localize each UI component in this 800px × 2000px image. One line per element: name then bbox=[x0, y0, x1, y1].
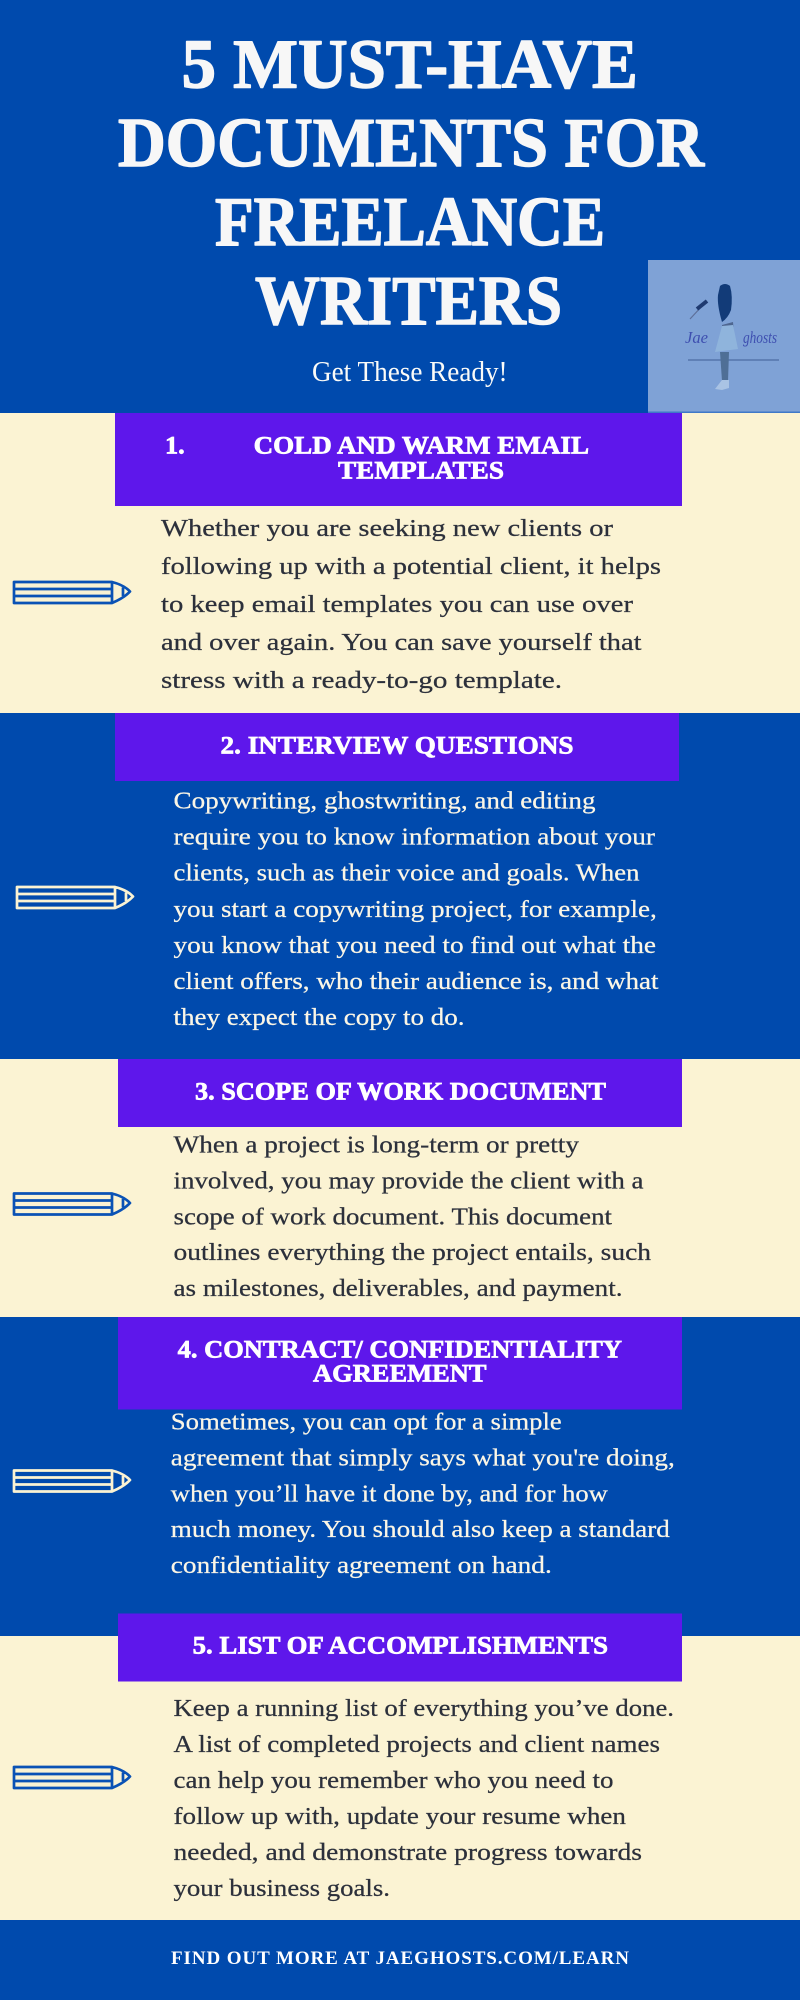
heading bar 1: 1. bbox=[165, 432, 185, 459]
icon: pencil 5 bbox=[14, 1767, 130, 1788]
heading bar 1: COLD AND WARM EMAIL bbox=[254, 432, 589, 459]
heading bar 5 bbox=[118, 1614, 682, 1682]
body text 3: involved, you may provide the client with a bbox=[174, 1167, 644, 1194]
heading bar 2: 2. INTERVIEW QUESTIONS bbox=[220, 732, 574, 759]
body text 1: and over again. You can save yourself that bbox=[161, 629, 642, 656]
body text 5: Keep a running list of everything you’ve done. bbox=[174, 1695, 674, 1722]
subtitle: Get These Ready! bbox=[312, 357, 508, 388]
body text 4: agreement that simply says what you're doing, bbox=[171, 1444, 675, 1471]
title: WRITERS bbox=[255, 263, 562, 340]
body text 3 bbox=[174, 1131, 651, 1302]
body text 2 bbox=[174, 788, 659, 1031]
panel: section 1 email templates bbox=[0, 413, 800, 713]
body text 2: require you to know information about your bbox=[174, 824, 655, 851]
body text 3: outlines everything the project entails, such bbox=[174, 1239, 651, 1266]
heading bar 2 bbox=[115, 713, 679, 781]
title: 5 MUST-HAVE bbox=[182, 26, 638, 103]
heading bar 3: 3. SCOPE OF WORK DOCUMENT bbox=[195, 1079, 606, 1106]
icon: pencil 4 bbox=[14, 1470, 130, 1492]
logo: Jae ghosts figure: ghosts bbox=[743, 328, 777, 347]
body text 5: needed, and demonstrate progress towards bbox=[174, 1839, 642, 1866]
body text 1: Whether you are seeking new clients or bbox=[161, 515, 613, 542]
heading bar 4 bbox=[118, 1317, 682, 1410]
body text 4 bbox=[171, 1408, 675, 1579]
body text 2: you know that you need to find out what the bbox=[174, 932, 656, 959]
body text 4: when you’ll have it done by, and for how bbox=[171, 1480, 608, 1507]
body text 3: scope of work document. This document bbox=[174, 1203, 612, 1230]
heading bar 1 bbox=[115, 413, 682, 506]
body text 5: A list of completed projects and client names bbox=[174, 1731, 660, 1758]
body text 2: clients, such as their voice and goals. When bbox=[174, 860, 640, 887]
title bbox=[118, 26, 705, 340]
heading bar 4: 4. CONTRACT/ CONFIDENTIALITY bbox=[178, 1336, 622, 1363]
body text 3: as milestones, deliverables, and payment. bbox=[174, 1275, 622, 1302]
footer text: FIND OUT MORE AT JAEGHOSTS.COM/LEARN bbox=[171, 1948, 629, 1969]
body text 5 bbox=[174, 1695, 674, 1902]
logo: Jae ghosts figure bbox=[648, 260, 800, 413]
heading bar 5: 5. LIST OF ACCOMPLISHMENTS bbox=[193, 1632, 608, 1659]
header panel bbox=[0, 0, 800, 413]
panel: section 2 interview questions bbox=[0, 713, 800, 1059]
body text 2: you start a copywriting project, for example, bbox=[174, 896, 657, 923]
footer panel bbox=[0, 1920, 800, 2000]
body text 2: Copywriting, ghostwriting, and editing bbox=[174, 788, 596, 815]
panel: section 5 accomplishments bbox=[0, 1614, 800, 1920]
heading bar 1: TEMPLATES bbox=[338, 457, 504, 484]
title: FREELANCE bbox=[215, 184, 605, 261]
heading bar 4: AGREEMENT bbox=[313, 1361, 487, 1388]
body text 4: confidentiality agreement on hand. bbox=[171, 1552, 552, 1579]
body text 5: can help you remember who you need to bbox=[174, 1767, 614, 1794]
logo: Jae ghosts figure: Jae bbox=[685, 328, 708, 347]
body text 5: follow up with, update your resume when bbox=[174, 1803, 626, 1830]
body text 2: they expect the copy to do. bbox=[174, 1004, 464, 1031]
body text 1: stress with a ready-to-go template. bbox=[161, 667, 562, 694]
icon: pencil 1 bbox=[14, 582, 130, 603]
body text 4: much money. You should also keep a standard bbox=[171, 1516, 670, 1543]
body text 1: following up with a potential client, it helps bbox=[161, 553, 661, 580]
body text 3: When a project is long-term or pretty bbox=[174, 1131, 580, 1158]
body text 1: to keep email templates you can use over bbox=[161, 591, 633, 618]
panel: section 4 contract bbox=[0, 1317, 800, 1636]
body text 2: client offers, who their audience is, and what bbox=[174, 968, 659, 995]
body text 4: Sometimes, you can opt for a simple bbox=[171, 1408, 562, 1435]
panel: section 3 scope of work bbox=[0, 1059, 800, 1317]
body text 5: your business goals. bbox=[174, 1875, 390, 1902]
icon: pencil 2 bbox=[17, 887, 133, 908]
title: DOCUMENTS FOR bbox=[118, 105, 705, 182]
icon: pencil 3 bbox=[14, 1194, 130, 1214]
body text 1 bbox=[161, 515, 661, 694]
heading bar 3 bbox=[118, 1059, 682, 1127]
